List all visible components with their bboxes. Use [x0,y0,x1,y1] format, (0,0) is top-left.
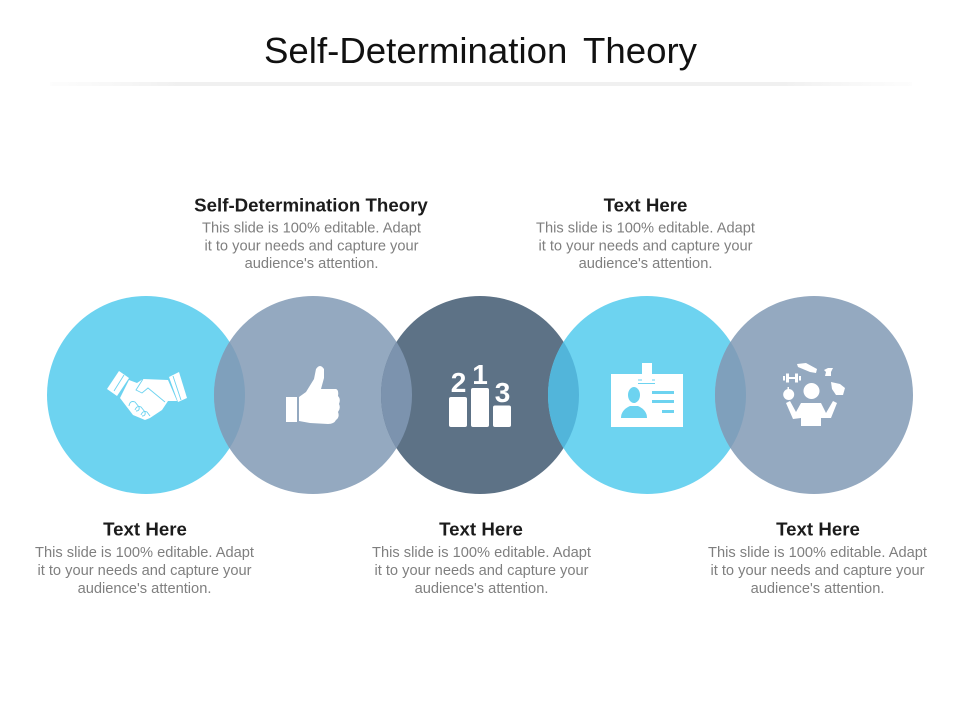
overlap 4-5 [715,342,746,448]
text block: Self-Determination Theory [194,194,428,272]
text block: top right: This slide is 100% editable. Adapt [536,220,755,236]
text block: bottom center: This slide is 100% editable. Adapt [372,545,591,561]
icon: podium with ranks: 2 [451,367,466,398]
text block: bottom right: Text Here [776,518,860,540]
text block: top right: audience's attention. [579,256,712,272]
text block: top right: Text Here [604,194,687,216]
text block: bottom center: Text Here [439,518,523,540]
circle 3 [381,296,579,494]
overlap 3-4 [548,342,579,448]
text block: bottom right: audience's attention. [751,581,884,597]
icon: podium with ranks: 1 [472,359,488,390]
text block: bottom right [708,518,927,597]
text block: Self-Determination Theory: This slide is 100% editable. Adapt [202,220,421,236]
circle 5 [715,296,913,494]
text block: top right [536,194,755,272]
text block: Self-Determination Theory: audience's attention. [245,256,378,272]
text block: top right: it to your needs and capture your [538,238,753,254]
text block: Self-Determination Theory: Self-Determination Theory [194,194,428,216]
text block: bottom left [35,518,254,597]
text block: bottom left: audience's attention. [78,581,211,597]
icon: juggling person [783,363,845,426]
overlap 1-2 [214,342,245,448]
text block: bottom center: it to your needs and capture your [374,563,589,579]
circle 4 [548,296,746,494]
text block: bottom left: This slide is 100% editable. Adapt [35,545,254,561]
circle 1 [47,296,245,494]
text block: bottom center: audience's attention. [415,581,548,597]
text block: bottom left: it to your needs and capture your [37,563,252,579]
text block: bottom right: This slide is 100% editable. Adapt [708,545,927,561]
circle 2 [214,296,412,494]
circle chain [47,296,913,494]
icon: podium with ranks: 3 [495,377,510,408]
icon: handshake [107,371,187,420]
text block: bottom center [372,518,591,597]
text block: Self-Determination Theory: it to your needs and capture your [204,238,419,254]
icon: podium with ranks [449,359,511,427]
overlap 2-3 [381,342,412,448]
text block: bottom left: Text Here [103,518,187,540]
icon: id card [611,363,683,427]
text block: bottom right: it to your needs and capture your [710,563,925,579]
icon: thumbs up [286,366,340,424]
title: Self-Determination Theory [264,30,697,71]
